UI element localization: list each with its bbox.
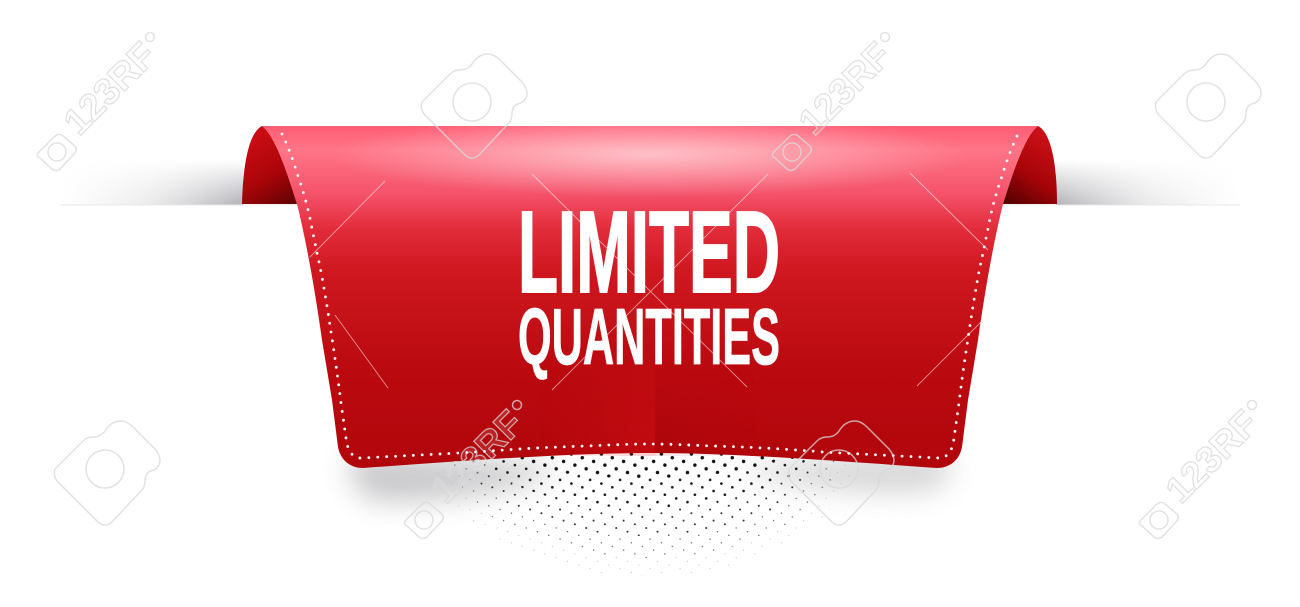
red ribbon banner bbox=[262, 113, 1038, 468]
stitching dots bbox=[282, 134, 1018, 458]
left ribbon back fold bbox=[242, 126, 297, 204]
headline: LIMITED: LIMITED bbox=[518, 187, 780, 317]
watermark: camera logo top right bbox=[1155, 54, 1261, 158]
watermark: 123RF top centre right bbox=[772, 32, 899, 170]
top highlight bbox=[330, 113, 970, 197]
watermark: camera logo bottom left bbox=[54, 421, 160, 525]
watermark: 123RF bottom right bbox=[1139, 400, 1266, 538]
watermark: 123RF top left bbox=[37, 32, 164, 170]
slot line bbox=[60, 204, 1240, 206]
left slot shadow bbox=[100, 165, 243, 204]
watermark: 123RF bottom centre bbox=[404, 400, 531, 538]
right ribbon back fold bbox=[1003, 126, 1057, 204]
headline: QUANTITIES: QUANTITIES bbox=[518, 292, 780, 381]
ribbon body bbox=[262, 126, 1038, 468]
right slot shadow bbox=[1056, 165, 1198, 204]
ribbon drop shadow bbox=[350, 455, 950, 501]
watermark: camera logo bottom centre bbox=[788, 421, 894, 525]
watermark: 123RF top centre right: 123RF bbox=[791, 34, 899, 143]
watermark: 123RF top left: 123RF bbox=[56, 34, 164, 143]
watermark: 123RF bottom right: 123RF bbox=[1158, 402, 1266, 511]
centre crease bbox=[560, 398, 726, 456]
watermark: 123RF bottom centre: 123RF bbox=[423, 402, 531, 511]
thin diagonal lines bbox=[310, 173, 988, 390]
halftone dot shadow bbox=[435, 324, 855, 576]
watermark: camera logo top centre bbox=[421, 54, 527, 158]
